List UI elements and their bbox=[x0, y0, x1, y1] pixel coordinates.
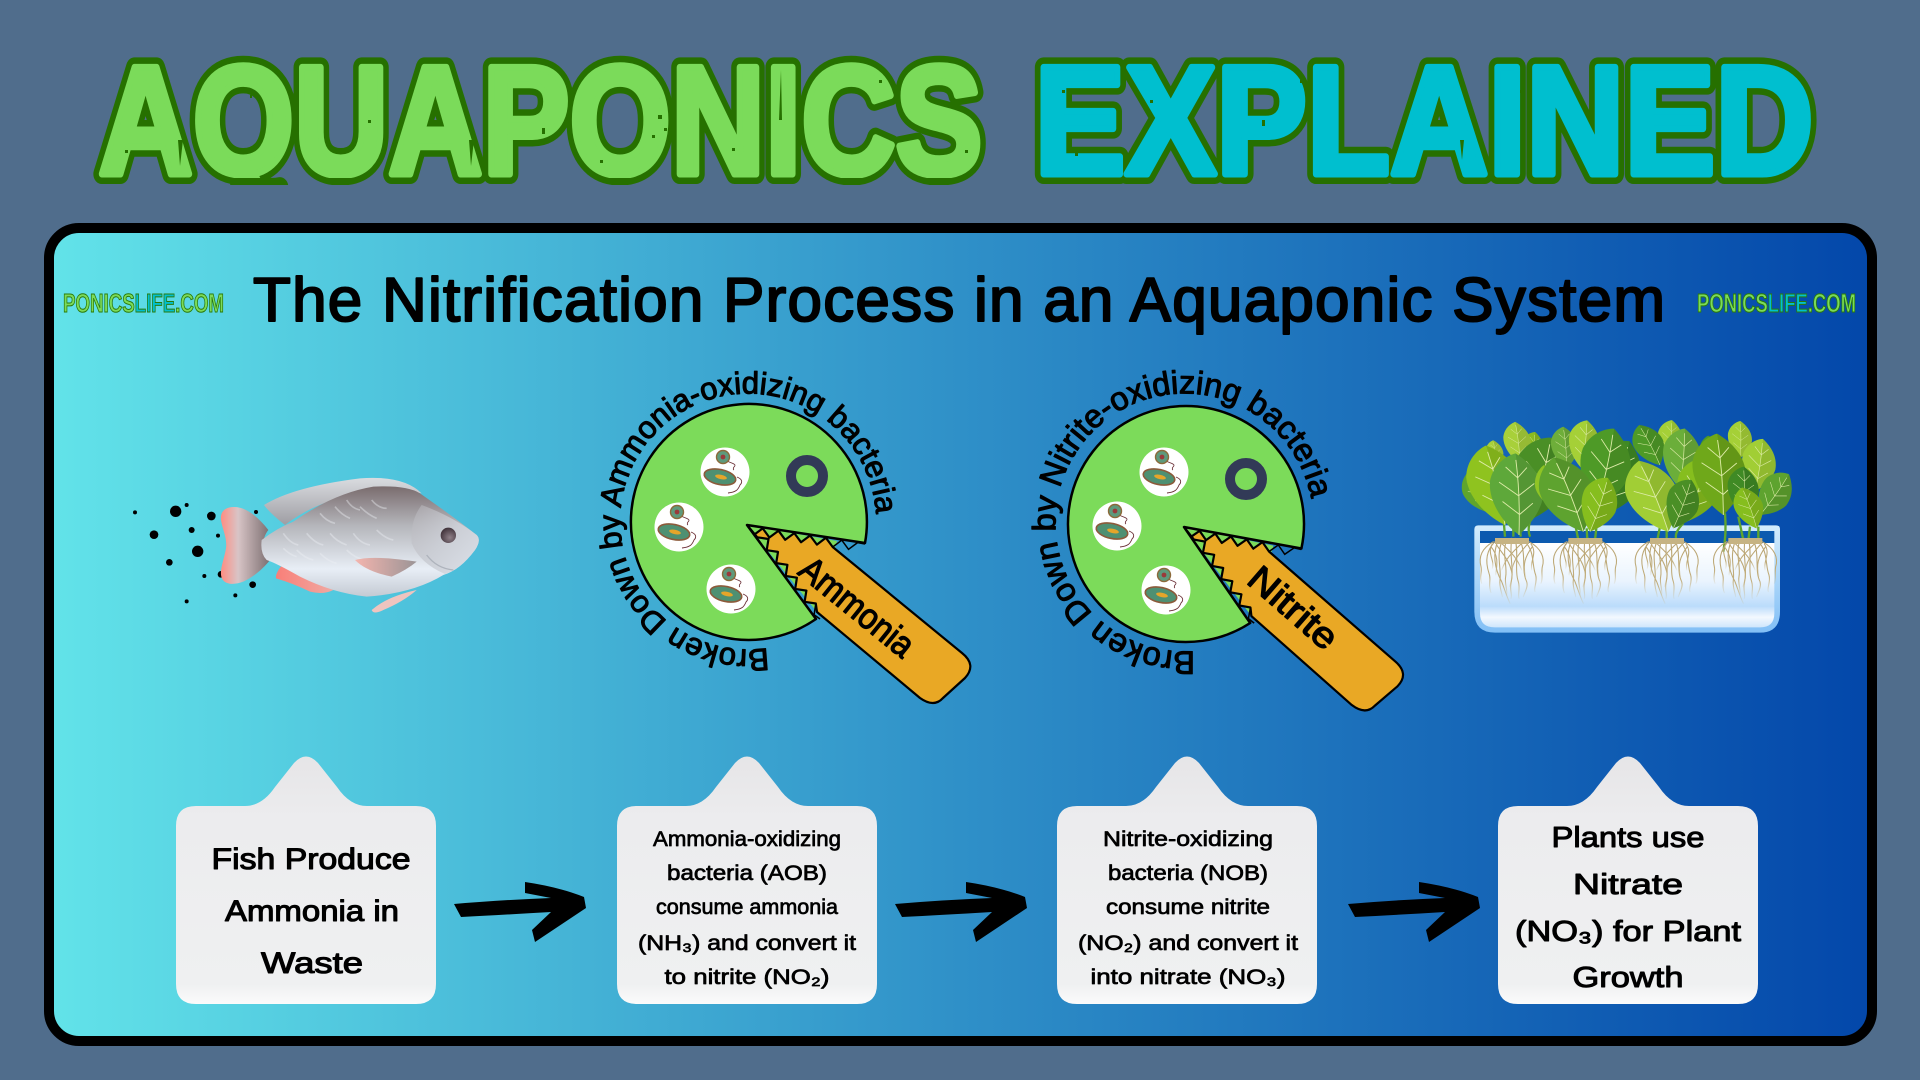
plant 4 bbox=[1690, 421, 1802, 603]
nitrite arc text: Broken Down by Nitrite-oxidizing bacteria bbox=[1031, 370, 1329, 674]
callout 1 text: Waste bbox=[261, 947, 363, 980]
callout 4 text: Nitrate bbox=[1573, 869, 1683, 901]
callout 4 text: Growth bbox=[1572, 962, 1684, 994]
fish body bbox=[261, 486, 479, 597]
callout 1 bbox=[176, 756, 436, 1004]
callout 4 text bbox=[1515, 822, 1741, 994]
main panel bbox=[44, 223, 1877, 1046]
ammonia bacteria icon 2 bbox=[654, 502, 704, 552]
fish ventral fin bbox=[372, 590, 417, 612]
tank opening bbox=[1480, 531, 1774, 543]
title word: AQUAPONICS bbox=[93, 56, 986, 185]
plant 3 bbox=[1615, 418, 1728, 603]
ammonia overhanging teeth bbox=[814, 540, 865, 619]
callout 3 text: into nitrate (NO₃) bbox=[1090, 966, 1286, 989]
plant 1 bbox=[1454, 420, 1577, 603]
title word: EXPLAINED: EXPLAINED bbox=[1034, 34, 1814, 207]
callout 3 text: bacteria (NOB) bbox=[1108, 862, 1268, 885]
ammonia pacman bbox=[631, 404, 867, 640]
title bbox=[93, 56, 1817, 185]
bacteria A: Ammonia bbox=[599, 370, 972, 704]
title word: EXPLAINED bbox=[1034, 57, 1817, 184]
callout 4 text: (NO₃) for Plant bbox=[1515, 916, 1741, 948]
waste dots bbox=[133, 503, 258, 603]
callout 1 text: Fish Produce bbox=[212, 843, 410, 876]
ammonia arc text: Broken Down by Ammonia-oxidizing bacteria bbox=[599, 370, 896, 671]
callout 2 text: Ammonia-oxidizing bbox=[653, 828, 841, 851]
tank frame bbox=[1474, 525, 1780, 633]
ammonia bacteria icon 1 bbox=[700, 448, 750, 496]
nitrite bacteria icon 3 bbox=[1142, 566, 1190, 614]
ammonia wedge backing bbox=[747, 525, 837, 612]
arrow 1 bbox=[454, 882, 586, 942]
ammonia ring bbox=[791, 460, 823, 492]
title word: AQUAPONICS: AQUAPONICS bbox=[98, 34, 982, 207]
ammonia bar bbox=[747, 525, 970, 703]
nitrite pacman and bar bbox=[1063, 403, 1411, 712]
fish head bbox=[411, 505, 479, 574]
callout 2 text: (NH₃) and convert it bbox=[638, 932, 856, 955]
title word: EXPLAINED: EXPLAINED bbox=[1034, 34, 1814, 207]
callout 4 text: Plants use bbox=[1552, 822, 1704, 854]
arrow 2 bbox=[895, 882, 1027, 942]
callout 4 bbox=[1498, 756, 1758, 1004]
callout 1 text bbox=[212, 843, 410, 980]
nitrite bacteria icon 2 bbox=[1092, 502, 1142, 550]
bacteria B: Nitrite bbox=[1031, 370, 1404, 712]
callout 2 text: consume ammonia bbox=[656, 896, 838, 919]
callout 1 text: Ammonia in bbox=[225, 895, 399, 928]
ammonia bar label: Ammonia bbox=[792, 548, 924, 666]
logo left: PONICSLIFE.COM bbox=[63, 288, 224, 318]
callout 3 text: Nitrite-oxidizing bbox=[1103, 828, 1273, 851]
nitrite bar label: Nitrite bbox=[1240, 557, 1347, 658]
fish mouth line bbox=[427, 555, 453, 570]
tank water bbox=[1480, 543, 1774, 627]
title word: AQUAPONICS: AQUAPONICS bbox=[98, 34, 982, 207]
plants in hydroponic tank bbox=[1454, 418, 1802, 633]
fish pectoral fin bbox=[355, 558, 417, 577]
nitrite bacteria icon 1 bbox=[1140, 448, 1188, 496]
fish scales bbox=[283, 500, 393, 563]
arrow 3 bbox=[1348, 882, 1480, 942]
callout 3 text: (NO₂) and convert it bbox=[1078, 932, 1298, 955]
panel heading: The Nitrification Process in an Aquaponic System bbox=[253, 266, 1665, 335]
callout 3 bbox=[1057, 756, 1317, 1004]
fish eye bbox=[441, 528, 456, 543]
logo right: PONICSLIFE.COM bbox=[1697, 288, 1856, 318]
fish anal fin bbox=[276, 563, 333, 593]
plant 2 bbox=[1528, 419, 1653, 603]
nitrite ring bbox=[1230, 463, 1262, 495]
fish with waste bbox=[133, 478, 479, 612]
fish dorsal fin bbox=[264, 478, 422, 525]
callout 2 text: bacteria (AOB) bbox=[667, 862, 827, 885]
callout 3 text bbox=[1078, 828, 1298, 989]
callout 2 text bbox=[638, 828, 856, 989]
ammonia bacteria icon 3 bbox=[706, 564, 756, 614]
fish tail bbox=[221, 507, 270, 584]
callout 3 text: consume nitrite bbox=[1106, 896, 1270, 919]
callout 2 bbox=[617, 756, 877, 1004]
callout 2 text: to nitrite (NO₂) bbox=[664, 966, 830, 989]
